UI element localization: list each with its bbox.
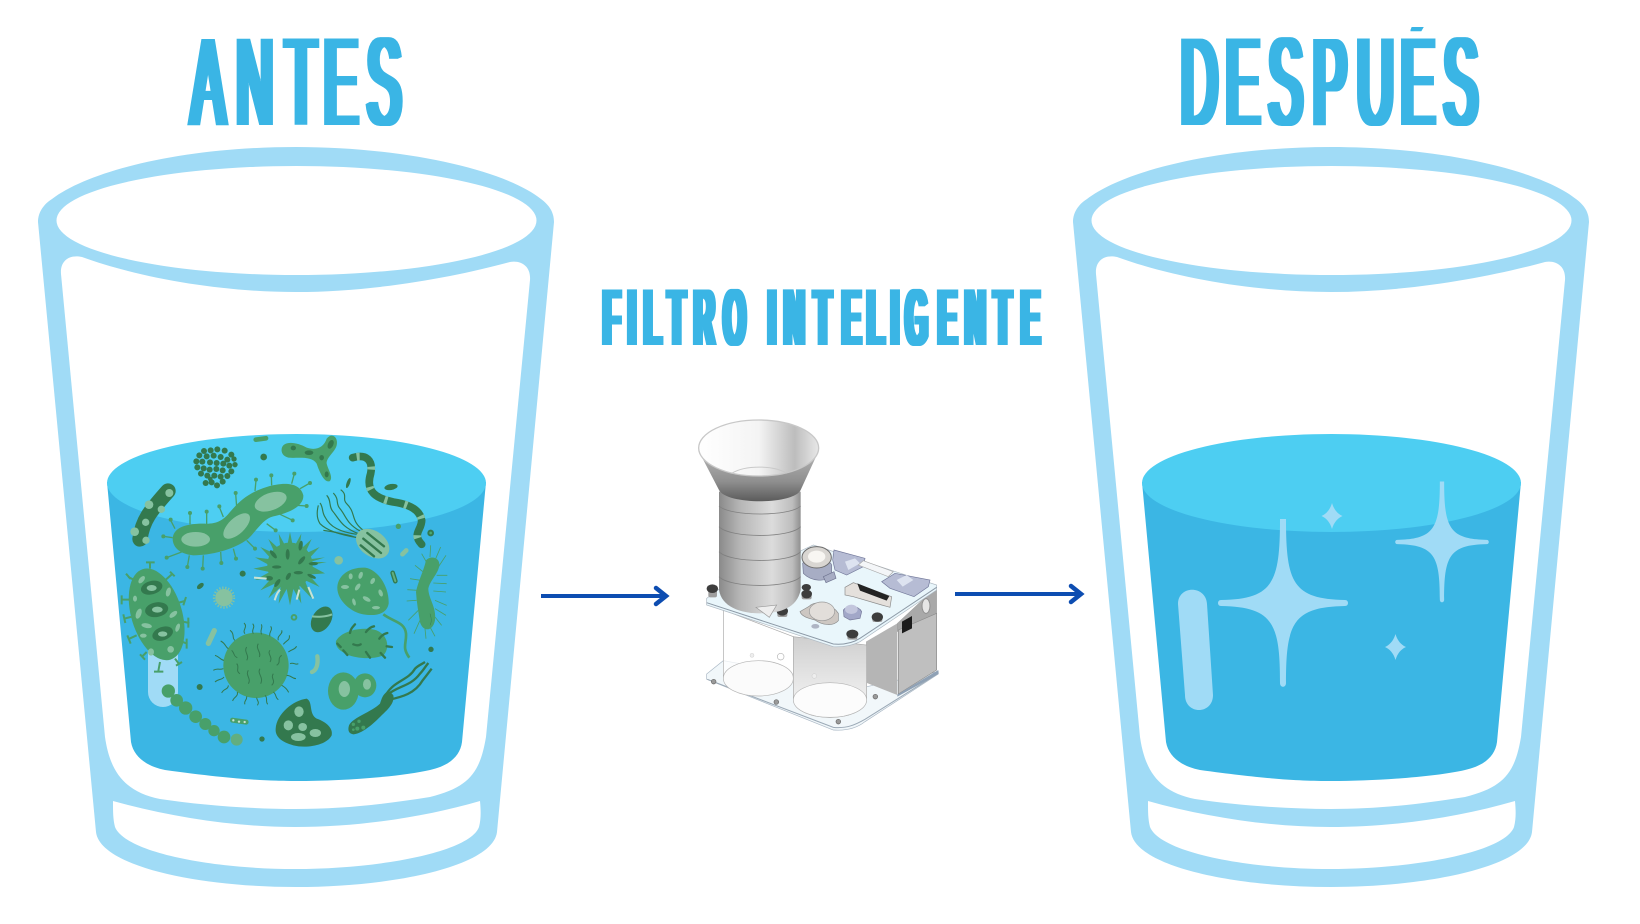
microbe: spiky star cell [253, 532, 327, 605]
microbe: flagellate teardrop [337, 568, 409, 658]
arrow: filter to glass [955, 586, 1081, 602]
sparkle: large [1218, 519, 1348, 687]
microbe: rod with spots [130, 489, 173, 544]
device: brackets and sensors [756, 547, 930, 629]
device: lower base plate [707, 661, 938, 730]
title: FILTRO INTELIGENTE: FILTRO INTELIGENTE [603, 272, 1040, 362]
microbe: dark flagellated cell [348, 662, 432, 734]
title: DESPUÉS: DESPUÉS [1181, 14, 1478, 153]
microbe: three-armed cell [282, 436, 337, 481]
microbe: pale spiky ball [214, 588, 234, 608]
highlight on water [1178, 590, 1213, 710]
glass: before [38, 147, 554, 887]
small scattered microbes [196, 436, 434, 742]
sparkle: medium [1395, 482, 1489, 602]
microbes in the water [119, 436, 447, 747]
microbe: dark amoeba [276, 699, 332, 747]
microbe: hairy rod [407, 545, 447, 639]
arrow: glass to filter [541, 588, 666, 604]
device: grey side box [866, 587, 938, 697]
microbe: ciliate with tendrils [317, 490, 395, 565]
microbe: dot cluster [193, 446, 238, 488]
sparkle: small lower [1385, 634, 1406, 660]
microbe: long bacterium with pili [161, 472, 312, 571]
microbe: striped worm [353, 457, 422, 544]
microbe: hairy round cell [213, 623, 298, 705]
device: transparent tanks [723, 610, 867, 717]
sparkle: small upper [1322, 503, 1342, 529]
water: before [107, 434, 486, 781]
device: smart filter [699, 420, 938, 730]
device: top plate [707, 545, 937, 647]
microbe: bead chain [162, 684, 243, 746]
water: after [1142, 434, 1521, 781]
microbe: budding cell [328, 672, 376, 710]
microbe: large cell with receptors [119, 562, 195, 672]
title: ANTES: ANTES [191, 14, 401, 153]
device: funnel column [699, 420, 819, 613]
glass: after [1073, 147, 1589, 887]
microbe: oval with short spines [336, 624, 392, 658]
